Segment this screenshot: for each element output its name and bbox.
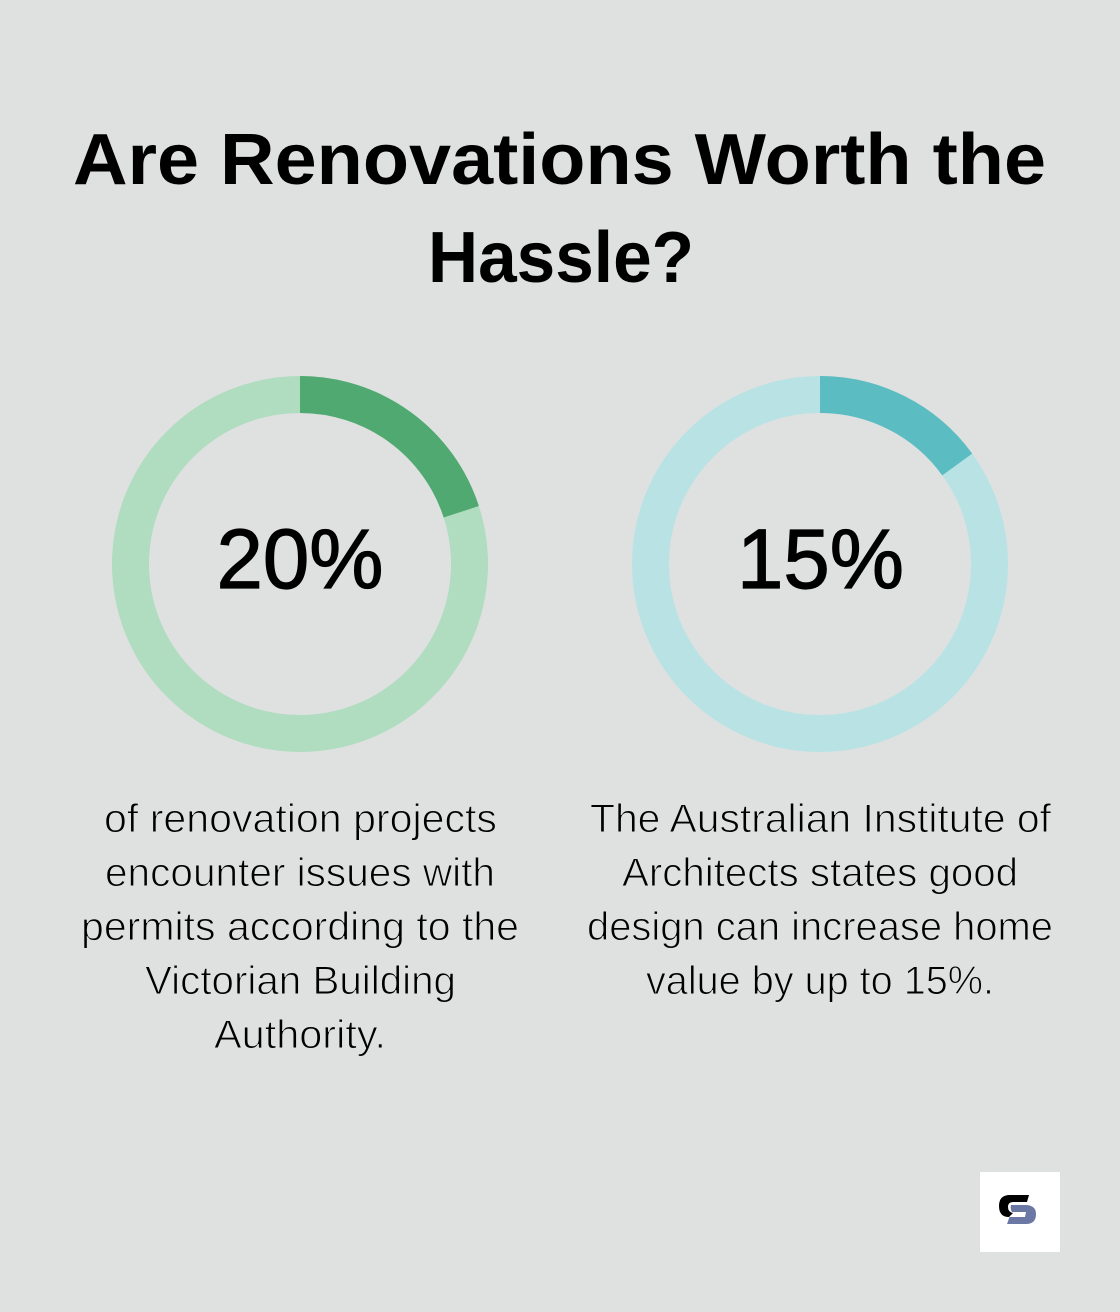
- description: permit issues: of renovation projects: [104, 797, 497, 841]
- description: permit issues: Victorian Building: [145, 959, 456, 1003]
- title: [73, 120, 1046, 298]
- panel: 15% statistic: [587, 394, 1053, 1003]
- description: permit issues: encounter issues with: [105, 851, 495, 895]
- description: design value: Architects states good: [622, 851, 1018, 895]
- panel: 20% statistic: [81, 394, 519, 1057]
- value: 20%: 20%: [216, 512, 384, 606]
- donut chart: 15%: [650, 394, 990, 734]
- title: Are Renovations Worth the: [73, 120, 1046, 200]
- description: permit issues: permits according to the: [81, 905, 519, 949]
- description: design value: value by up to 15%.: [646, 959, 994, 1003]
- description: permit issues: [81, 797, 519, 1057]
- donut chart: 20%: [130, 394, 470, 734]
- description: design value: design can increase home: [587, 905, 1053, 949]
- description: permit issues: Authority.: [214, 1013, 386, 1057]
- description: design value: [587, 797, 1053, 1003]
- value: 15%: 15%: [737, 512, 904, 606]
- logo badge: [980, 1172, 1060, 1252]
- description: design value: The Australian Institute of: [590, 797, 1052, 841]
- title: Hassle?: [428, 218, 694, 298]
